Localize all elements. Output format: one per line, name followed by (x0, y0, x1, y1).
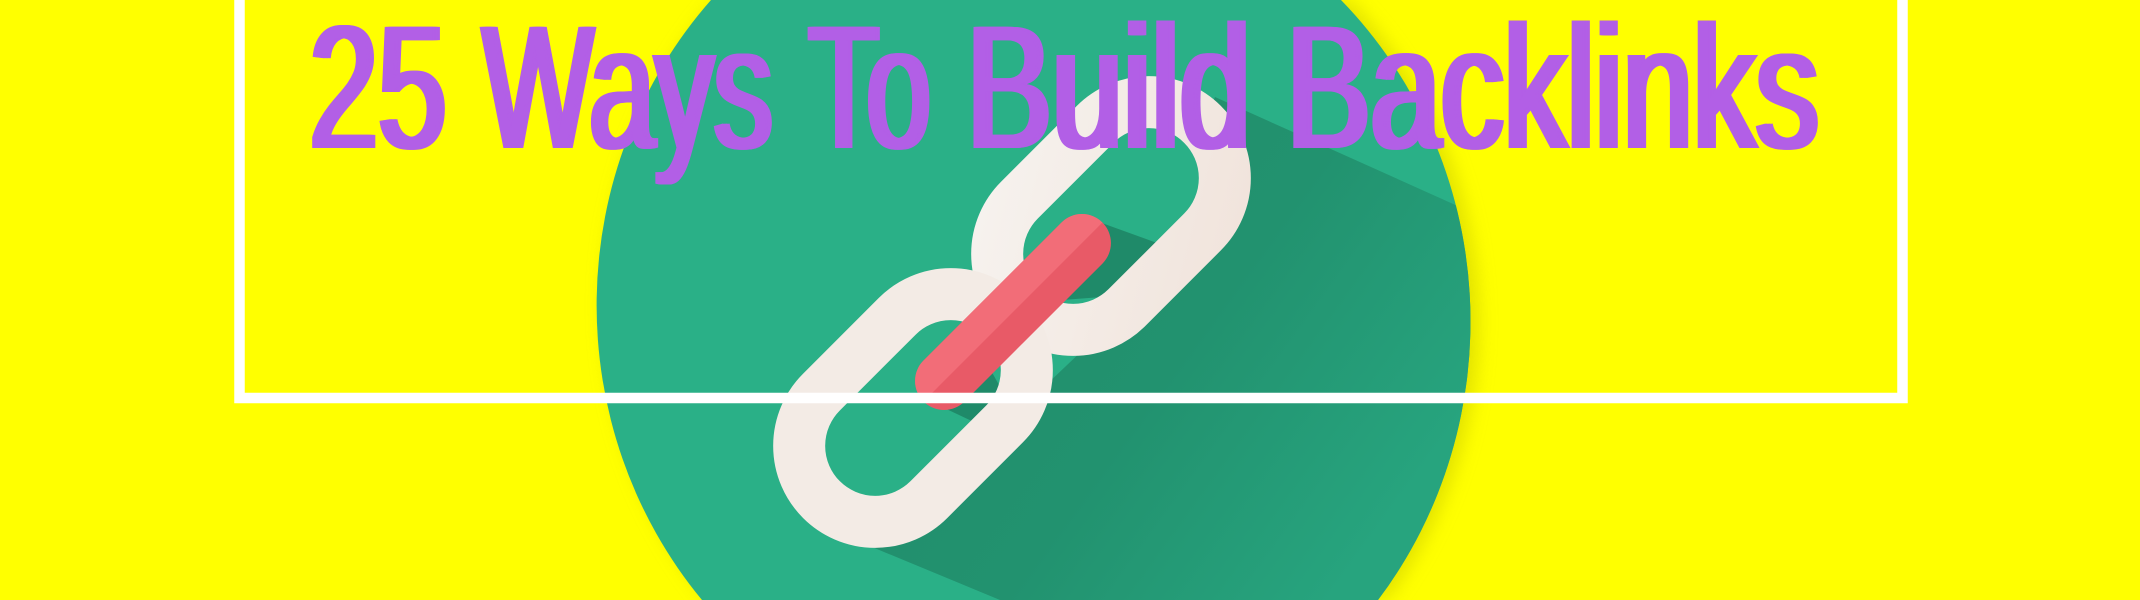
white frame (240, 0, 1902, 398)
icon: green disc with chain link (597, 0, 1480, 600)
shadow inside upper link (1062, 222, 1157, 300)
connector bar (915, 214, 1111, 410)
disc shadow (605, 0, 1479, 600)
chain link: lower (768, 263, 1058, 553)
title (306, 0, 1818, 186)
shadow inside lower link (940, 367, 1004, 423)
chain link: upper (966, 71, 1256, 361)
green disc (597, 0, 1471, 600)
long cast shadow (872, 97, 1480, 600)
